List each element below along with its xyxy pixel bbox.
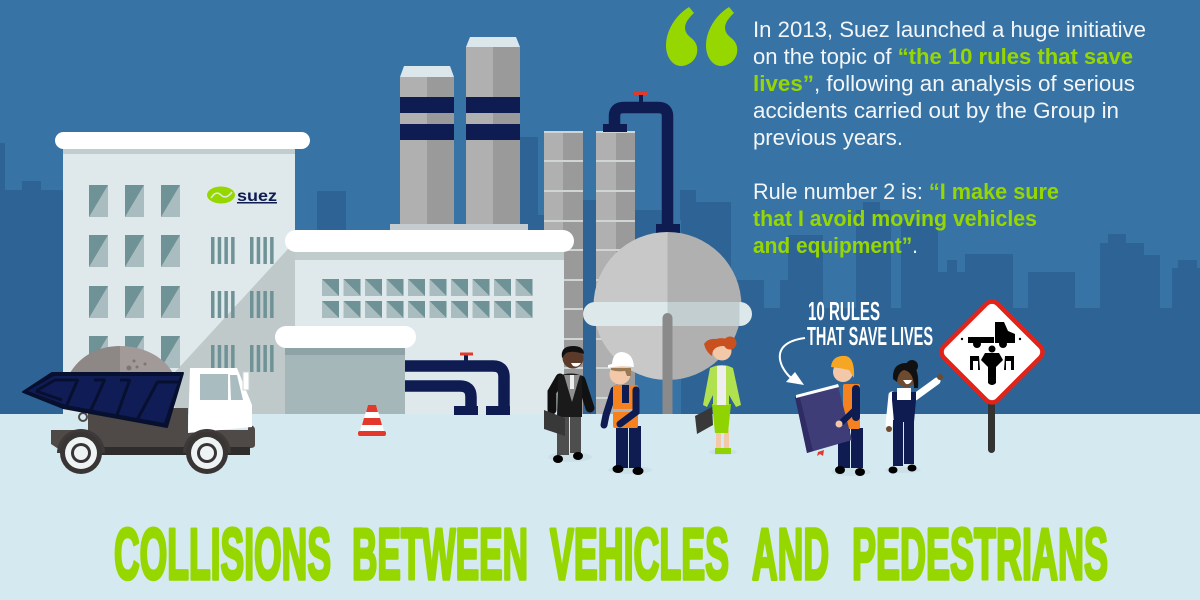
cab [188,368,252,433]
building shadow [175,249,296,414]
suez logo [207,186,277,205]
quote text: lives”, following an analysis of serious [753,71,1135,96]
quote text: on the topic of “the 10 rules that save [753,44,1133,69]
warning sign [938,298,1046,453]
quote text: previous years. [753,125,903,150]
chimneys [390,37,528,231]
person: woman in green [695,336,741,455]
left office building [55,132,310,414]
city skyline [0,137,1200,414]
middle factory building [285,230,574,414]
title [114,515,1108,595]
ground pipes with valve [405,352,510,415]
annex garage [275,326,416,414]
suez logo: suez [237,188,277,205]
gravel pile [70,346,173,373]
title: BETWEEN [352,515,528,595]
caption: 10 rules that save lives: THAT SAVE LIVES [807,321,933,351]
caption: 10 rules that save lives [807,296,933,351]
traffic cone [358,405,386,436]
quotation mark [666,7,737,66]
ringed columns [544,131,635,414]
spherical tank [583,232,752,414]
office windows [89,185,274,372]
caption: 10 rules that save lives: 10 RULES [808,296,880,326]
chassis [51,408,255,455]
wheels [57,429,231,474]
quote text: and equipment”. [753,233,918,258]
arrow: caption to book [780,338,805,385]
person: businessman [544,346,592,463]
overhead pipe with valve [603,92,680,233]
ground [0,414,1200,600]
sign icon: truck and pedestrian [961,322,1021,385]
quote text: accidents carried out by the Group in [753,98,1119,123]
factory windows [322,279,532,318]
person: woman pointing at sign [885,360,943,474]
quote text: that I avoid moving vehicles [753,206,1037,231]
title: VEHICLES [550,515,729,595]
dump bed [23,373,183,427]
person: worker with rule book [795,356,871,476]
quote text: Rule number 2 is: “I make sure [753,179,1059,204]
title: COLLISIONS [114,515,331,595]
title: AND [752,515,829,595]
person: engineer in hard hat [604,352,652,475]
quote text: In 2013, Suez launched a huge initiative [753,17,1146,42]
dump truck [23,346,255,474]
quote text [753,17,1146,258]
rule book [795,384,852,456]
